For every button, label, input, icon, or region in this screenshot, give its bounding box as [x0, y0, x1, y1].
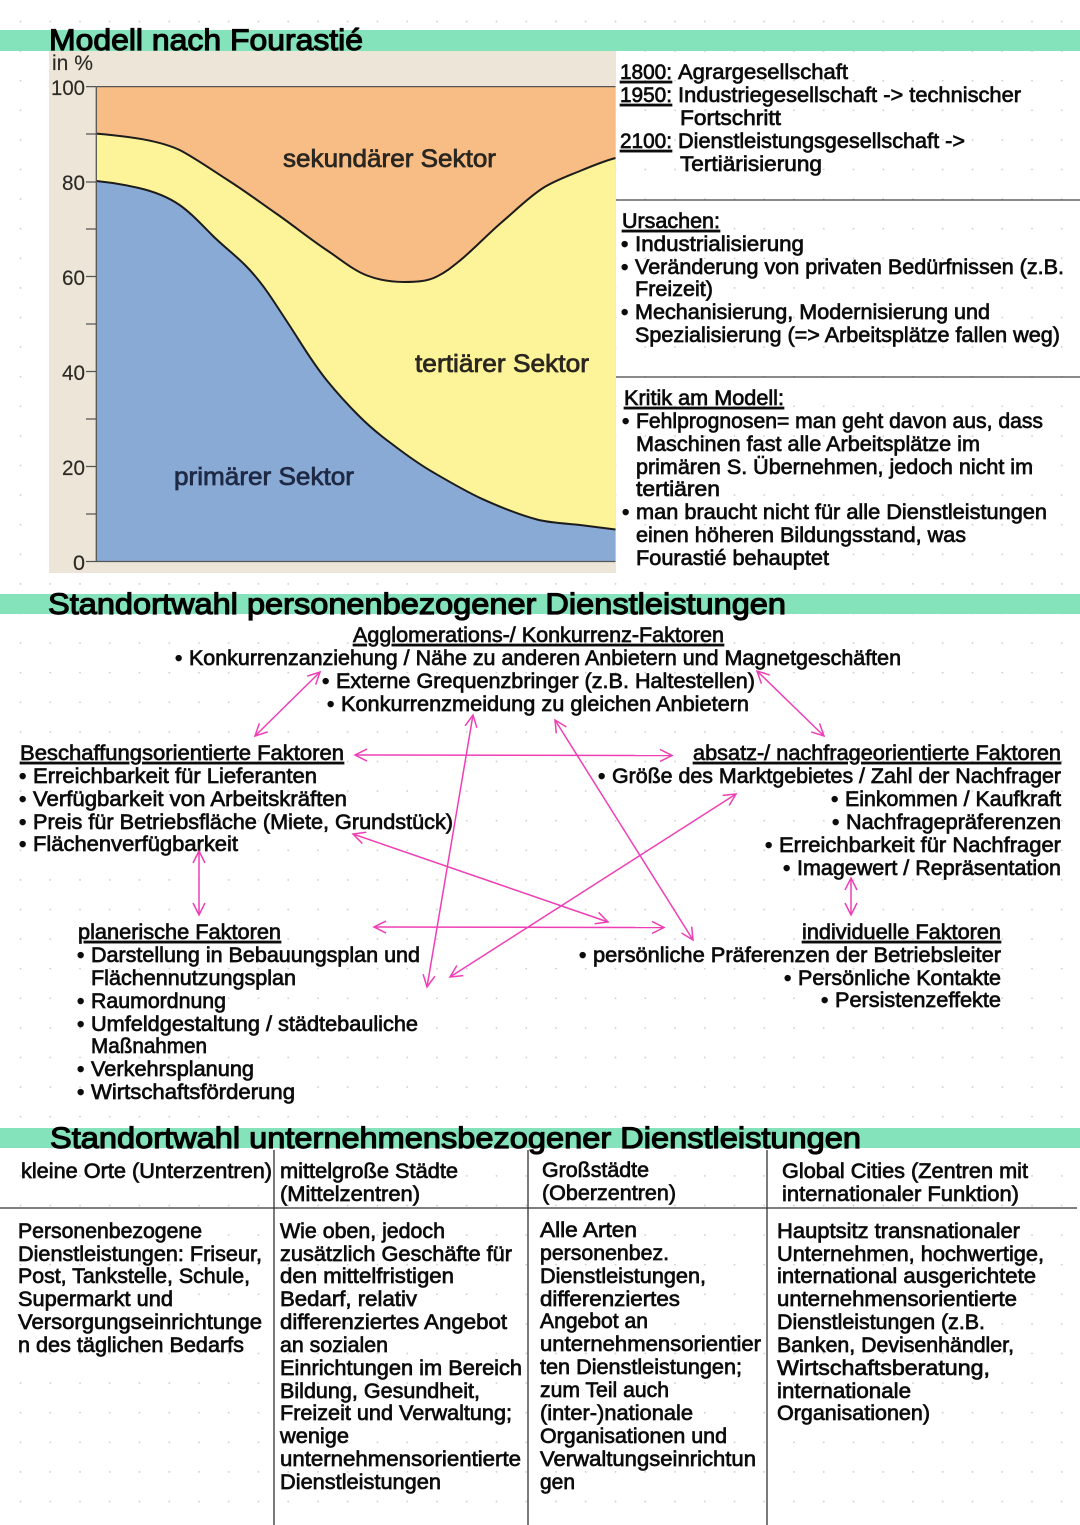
text block: Ursachen: Industrialisierung	[635, 233, 804, 256]
table column: Großstädte: ten Dienstleistungen;	[540, 1356, 742, 1379]
text block: Beschaffungsorientierte Faktoren: Erreichbarkeit für Lieferanten	[33, 765, 317, 788]
area chart: Fourastié sector model: 60	[62, 267, 85, 290]
area chart: Fourastié sector model: 40	[62, 362, 85, 385]
table column: mittelgroße Städte: Wie oben, jedoch	[280, 1220, 445, 1243]
text block: Kritik am Modell: Kritik am Modell:	[624, 387, 784, 410]
area chart: Fourastié sector model: tertiärer Sektor	[415, 350, 589, 378]
text block: planerische Faktoren: Wirtschaftsförderung	[91, 1081, 295, 1104]
table column: Großstädte: Alle Arten	[540, 1219, 637, 1242]
table column: mittelgroße Städte: Dienstleistungen	[280, 1471, 441, 1494]
text block: planerische Faktoren: planerische Faktoren	[78, 921, 281, 944]
table column: kleine Orte: Personenbezogene	[18, 1220, 202, 1243]
table column: Global Cities	[777, 1160, 1044, 1425]
text block: Kritik am Modell: •	[622, 410, 629, 433]
table column: Großstädte: Verwaltungseinrichtun	[540, 1448, 756, 1471]
table column: Großstädte: personenbez.	[540, 1242, 669, 1265]
table column: Großstädte: zum Teil auch	[540, 1379, 669, 1402]
table column: Großstädte	[540, 1159, 761, 1494]
text block: Kritik am Modell: •	[622, 501, 629, 524]
text block: Beschaffungsorientierte Faktoren: •	[19, 765, 26, 788]
timeline text: Fortschritt	[680, 107, 781, 130]
text block: absatz-/nachfrageorientierte Faktoren: •	[598, 765, 605, 788]
text block: absatz-/nachfrageorientierte Faktoren: •	[832, 811, 839, 834]
table column: kleine Orte	[18, 1160, 272, 1357]
text block: Kritik am Modell: Fehlprognosen= man geht davon aus, dass	[636, 410, 1043, 433]
text block: Kritik am Modell: einen höheren Bildungsstand, was	[636, 524, 966, 547]
section 3 heading band: Standortwahl unternehmensbezogener Dienstleistungen	[50, 1122, 861, 1155]
text block: individuelle Faktoren: Persönliche Kontakte	[798, 967, 1001, 990]
table column: mittelgroße Städte: differenziertes Angebot	[280, 1311, 507, 1334]
text block: Beschaffungsorientierte Faktoren: Flächenverfügbarkeit	[33, 833, 238, 856]
timeline text: Agrargesellschaft	[678, 61, 848, 84]
text block: Agglomerations-Faktoren: Externe Grequenzbringer (z.B. Haltestellen)	[336, 670, 755, 693]
text block: planerische Faktoren: Darstellung in Bebauungsplan und	[91, 944, 420, 967]
area chart: Fourastié sector model: 20	[62, 457, 85, 480]
table column: Global Cities: international ausgerichtete	[777, 1265, 1036, 1288]
area chart: Fourastié sector model: primärer Sektor	[174, 463, 354, 491]
table column: Global Cities: internationaler Funktion)	[782, 1183, 1019, 1206]
text block: Agglomerations-Faktoren: Konkurrenzmeidung zu gleichen Anbietern	[341, 693, 749, 716]
text block: Beschaffungsorientierte Faktoren	[19, 742, 453, 856]
table column: Großstädte: (Oberzentren)	[542, 1182, 676, 1205]
text block: Agglomerations-Faktoren: Konkurrenzanziehung / Nähe zu anderen Anbietern und Magnetgeschäften	[189, 647, 901, 670]
table column: Global Cities: Unternehmen, hochwertige,	[777, 1243, 1044, 1266]
text block: absatz-/nachfrageorientierte Faktoren: •	[765, 834, 772, 857]
area chart: Fourastié sector model: 80	[62, 172, 85, 195]
text block: Kritik am Modell: tertiären	[636, 478, 720, 501]
text block: Ursachen: Freizeit)	[635, 278, 713, 301]
timeline text: 2100:	[620, 130, 672, 153]
text block: planerische Faktoren: Umfeldgestaltung / städtebauliche	[91, 1013, 418, 1036]
table column: mittelgroße Städte	[279, 1160, 522, 1494]
timeline text: Tertiärisierung	[680, 153, 822, 176]
text block: Ursachen: •	[621, 256, 628, 279]
text block: individuelle Faktoren: Persistenzeffekte	[835, 989, 1001, 1012]
table column: Global Cities: unternehmensorientierte	[777, 1288, 1017, 1311]
text block: absatz-/nachfrageorientierte Faktoren: absatz-/ nachfrageorientierte Faktoren	[693, 742, 1061, 765]
section 3 heading band	[0, 1122, 1080, 1155]
table column: kleine Orte: kleine Orte (Unterzentren)	[21, 1160, 272, 1183]
area chart: Fourastié sector model: 0	[73, 552, 85, 575]
table column: Großstädte: differenziertes	[540, 1288, 680, 1311]
section 1 heading band	[0, 24, 1080, 57]
table column: kleine Orte: n des täglichen Bedarfs	[18, 1334, 244, 1357]
text block: individuelle Faktoren: •	[821, 989, 828, 1012]
table column: Großstädte: (inter-)nationale	[540, 1402, 693, 1425]
section 2 heading band	[0, 588, 1080, 621]
table column: Großstädte: Angebot an	[540, 1310, 648, 1333]
timeline text: Dienstleistungsgesellschaft ->	[678, 130, 965, 153]
text block: absatz-/nachfrageorientierte Faktoren: •	[783, 857, 790, 880]
table column: mittelgroße Städte: Einrichtungen im Bereich	[280, 1357, 522, 1380]
table column: mittelgroße Städte: Freizeit und Verwaltung;	[280, 1402, 512, 1425]
text block: Agglomerations-Faktoren	[175, 624, 901, 716]
table column: kleine Orte: Supermarkt und	[18, 1288, 173, 1311]
table column: Global Cities: Wirtschaftsberatung,	[777, 1357, 990, 1380]
table column: mittelgroße Städte: zusätzlich Geschäfte für	[280, 1243, 512, 1266]
table column: mittelgroße Städte: an sozialen	[280, 1334, 388, 1357]
text block: Kritik am Modell: man braucht nicht für alle Dienstleistungen	[636, 501, 1047, 524]
arrows: connections between location factors	[199, 671, 851, 987]
text block: Agglomerations-Faktoren: Agglomerations-/ Konkurrenz-Faktoren	[353, 624, 724, 647]
table column: Großstädte: unternehmensorientier	[540, 1333, 761, 1356]
text block: planerische Faktoren: •	[77, 1013, 84, 1036]
text block: planerische Faktoren: •	[77, 944, 84, 967]
text block: Agglomerations-Faktoren: •	[327, 693, 334, 716]
text block: individuelle Faktoren: •	[579, 944, 586, 967]
timeline text	[620, 61, 1021, 176]
table column: mittelgroße Städte: den mittelfristigen	[280, 1265, 454, 1288]
text block: absatz-/nachfrageorientierte Faktoren: Nachfragepräferenzen	[846, 811, 1061, 834]
table column: mittelgroße Städte: wenige	[279, 1425, 349, 1448]
text block: Kritik am Modell: Fourastié behauptet	[636, 547, 829, 570]
text block: Beschaffungsorientierte Faktoren: Preis für Betriebsfläche (Miete, Grundstück)	[33, 811, 453, 834]
table column: mittelgroße Städte: (Mittelzentren)	[280, 1183, 420, 1206]
area chart: Fourastié sector model	[49, 51, 616, 575]
text block: absatz-/nachfrageorientierte Faktoren: •	[831, 788, 838, 811]
text block: individuelle Faktoren	[579, 921, 1001, 1012]
text block: Ursachen: Mechanisierung, Modernisierung und	[635, 301, 990, 324]
area chart: Fourastié sector model: 100	[51, 77, 85, 100]
table column: Global Cities: Hauptsitz transnationaler	[777, 1220, 1020, 1243]
table column: Global Cities: internationale	[777, 1380, 911, 1403]
text block: Ursachen: Spezialisierung (=> Arbeitsplätze fallen weg)	[635, 324, 1060, 347]
timeline text: 1950:	[620, 84, 672, 107]
table column: mittelgroße Städte: Bildung, Gesundheit,	[280, 1380, 480, 1403]
text block: Beschaffungsorientierte Faktoren: •	[19, 811, 26, 834]
text block: Agglomerations-Faktoren: •	[322, 670, 329, 693]
text block: planerische Faktoren	[77, 921, 420, 1104]
text block: planerische Faktoren: •	[77, 990, 84, 1013]
section 2 heading band: Standortwahl personenbezogener Dienstleistungen	[48, 588, 786, 621]
text block: individuelle Faktoren: persönliche Präferenzen der Betriebsleiter	[593, 944, 1001, 967]
text block: planerische Faktoren: •	[77, 1081, 84, 1104]
table column: Großstädte: gen	[540, 1471, 575, 1494]
text block: planerische Faktoren: •	[77, 1058, 84, 1081]
table column: Großstädte: Dienstleistungen,	[540, 1265, 706, 1288]
table column: Großstädte: Großstädte	[542, 1159, 649, 1182]
text block: Beschaffungsorientierte Faktoren: •	[19, 833, 26, 856]
text block: Ursachen: Veränderung von privaten Bedürfnissen (z.B.	[635, 256, 1064, 279]
text block: planerische Faktoren: Verkehrsplanung	[91, 1058, 254, 1081]
text block: planerische Faktoren: Raumordnung	[91, 990, 226, 1013]
table column: Global Cities: Organisationen)	[777, 1402, 930, 1425]
text block: Ursachen: Ursachen:	[622, 210, 720, 233]
text block: individuelle Faktoren: individuelle Faktoren	[802, 921, 1001, 944]
text block: absatz-/nachfrageorientierte Faktoren: Größe des Marktgebietes / Zahl der Nachfrager	[612, 765, 1061, 788]
text block: Kritik am Modell: primären S. Übernehmen, jedoch nicht im	[636, 456, 1033, 479]
table column: Global Cities: Banken, Devisenhändler,	[777, 1334, 1014, 1357]
table column: kleine Orte: Post, Tankstelle, Schule,	[18, 1265, 250, 1288]
text block: Beschaffungsorientierte Faktoren: Verfügbarkeit von Arbeitskräften	[33, 788, 347, 811]
text block: Agglomerations-Faktoren: •	[175, 647, 182, 670]
table column: kleine Orte: Dienstleistungen: Friseur,	[18, 1243, 262, 1266]
table column: kleine Orte: Versorgungseinrichtunge	[18, 1311, 262, 1334]
area chart: Fourastié sector model: in %	[52, 52, 93, 75]
table column: Großstädte: Organisationen und	[540, 1425, 727, 1448]
text block: absatz-/nachfrageorientierte Faktoren	[598, 742, 1061, 880]
area chart: Fourastié sector model: sekundärer Sektor	[283, 145, 496, 173]
text block: Beschaffungsorientierte Faktoren: •	[19, 788, 26, 811]
table column: mittelgroße Städte: Bedarf, relativ	[280, 1288, 418, 1311]
table column: Global Cities: Global Cities (Zentren mit	[782, 1160, 1028, 1183]
table column: Global Cities: Dienstleistungen (z.B.	[777, 1311, 985, 1334]
text block: Ursachen: •	[621, 301, 628, 324]
text block: Beschaffungsorientierte Faktoren: Beschaffungsorientierte Faktoren	[20, 742, 344, 765]
timeline text: 1800:	[620, 61, 672, 84]
text block: Kritik am Modell: Maschinen fast alle Arbeitsplätze im	[636, 433, 980, 456]
text block: planerische Faktoren: Flächennutzungsplan	[91, 967, 296, 990]
table column: mittelgroße Städte: unternehmensorientierte	[280, 1448, 521, 1471]
text block: absatz-/nachfrageorientierte Faktoren: Erreichbarkeit für Nachfrager	[779, 834, 1061, 857]
text block: Kritik am Modell	[622, 387, 1047, 570]
text block: planerische Faktoren: Maßnahmen	[91, 1035, 207, 1058]
text block: absatz-/nachfrageorientierte Faktoren: Einkommen / Kaufkraft	[845, 788, 1061, 811]
text block: absatz-/nachfrageorientierte Faktoren: Imagewert / Repräsentation	[797, 857, 1061, 880]
text block: Ursachen: •	[621, 233, 628, 256]
text block: Ursachen	[621, 210, 1064, 347]
text block: individuelle Faktoren: •	[784, 967, 791, 990]
timeline text: Industriegesellschaft -> technischer	[678, 84, 1021, 107]
table column: mittelgroße Städte: mittelgroße Städte	[280, 1160, 458, 1183]
section 1 heading band: Modell nach Fourastié	[49, 24, 363, 57]
